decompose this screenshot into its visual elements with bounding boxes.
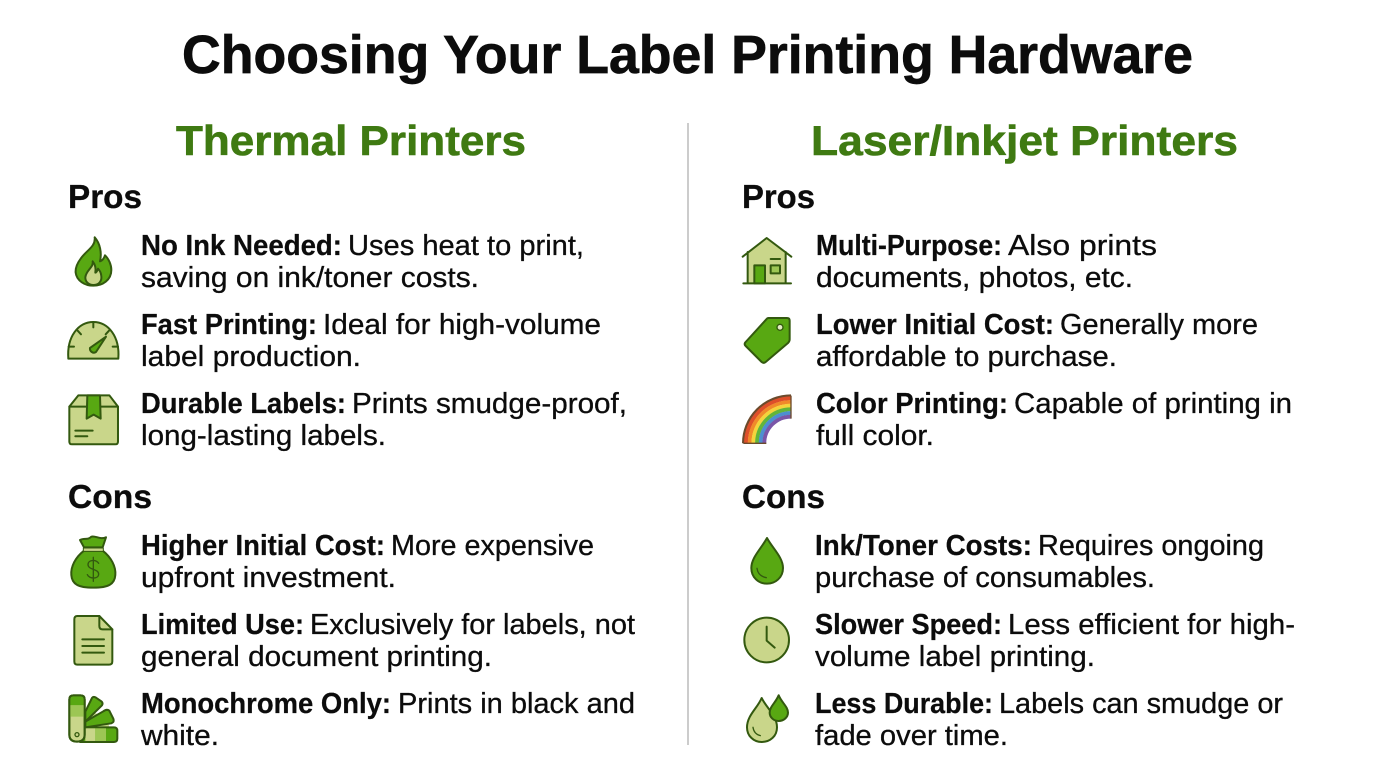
text: ink/toner costs: Ink/Toner Costs: bbox=[815, 530, 1032, 562]
heading: thermal printers: Thermal Printers bbox=[176, 117, 526, 164]
icon: colour swatches bbox=[69, 695, 117, 742]
text: fast printing bbox=[141, 309, 601, 373]
text: multi-purpose: Also prints bbox=[1008, 230, 1157, 262]
text: color printing: Color Printing: bbox=[816, 388, 1008, 420]
text: higher initial cost: upfront investment. bbox=[141, 562, 396, 594]
heading: laser/inkjet printers: Laser/Inkjet Printers bbox=[811, 117, 1238, 164]
text: durable labels: long-lasting labels. bbox=[141, 420, 386, 452]
text: limited use: general document printing. bbox=[141, 641, 492, 673]
icon: price tag bbox=[745, 318, 790, 363]
text: limited use: Exclusively for labels, not bbox=[310, 609, 635, 641]
text: higher initial cost: Higher Initial Cost: bbox=[141, 530, 385, 562]
icon: package box bbox=[69, 395, 118, 444]
icon: house bbox=[743, 238, 791, 283]
text: durable labels bbox=[141, 388, 627, 452]
text: ink/toner costs: purchase of consumables. bbox=[815, 562, 1155, 594]
text: higher initial cost bbox=[141, 530, 594, 594]
text: multi-purpose: Multi-Purpose: bbox=[816, 230, 1002, 262]
text: ink/toner costs: Requires ongoing bbox=[1038, 530, 1264, 562]
icon: rainbow bbox=[743, 396, 791, 443]
icon: fading drops bbox=[747, 695, 788, 742]
text: monochrome only: Prints in black and bbox=[398, 688, 635, 720]
text: slower speed: Slower Speed: bbox=[815, 609, 1002, 641]
text: color printing bbox=[816, 388, 1292, 452]
text: no ink needed: saving on ink/toner costs. bbox=[141, 262, 479, 294]
text: less durable: Labels can smudge or bbox=[999, 688, 1284, 720]
text: lower initial cost: affordable to purchase. bbox=[816, 341, 1117, 373]
text: fast printing: Fast Printing: bbox=[141, 309, 317, 341]
text: fast printing: label production. bbox=[141, 341, 361, 373]
text: durable labels: Prints smudge-proof, bbox=[352, 388, 627, 420]
icon: speed gauge bbox=[68, 322, 118, 359]
heading: thermal pros: Pros bbox=[68, 178, 142, 215]
text: lower initial cost bbox=[816, 309, 1258, 373]
text: slower speed bbox=[815, 609, 1295, 673]
text: higher initial cost: More expensive bbox=[391, 530, 594, 562]
text: less durable: Less Durable: bbox=[815, 688, 993, 720]
text: lower initial cost: Lower Initial Cost: bbox=[816, 309, 1054, 341]
text: durable labels: Durable Labels: bbox=[141, 388, 346, 420]
text: no ink needed bbox=[141, 230, 584, 294]
heading: thermal cons: Cons bbox=[68, 478, 152, 515]
text: lower initial cost: Generally more bbox=[1060, 309, 1258, 341]
text: no ink needed: No Ink Needed: bbox=[141, 230, 342, 262]
text: monochrome only: white. bbox=[140, 720, 219, 752]
text: no ink needed: Uses heat to print, bbox=[348, 230, 584, 262]
panel: laser and inkjet printers bbox=[742, 117, 1295, 752]
text: monochrome only: Monochrome Only: bbox=[141, 688, 391, 720]
icon: clock bbox=[744, 618, 789, 662]
text: slower speed: Less efficient for high- bbox=[1008, 609, 1295, 641]
panel: thermal printers bbox=[68, 117, 635, 752]
heading: laser cons: Cons bbox=[742, 478, 825, 515]
text: ink/toner costs bbox=[815, 530, 1264, 594]
text: less durable: fade over time. bbox=[815, 720, 1008, 752]
text: limited use: Limited Use: bbox=[141, 609, 304, 641]
icon: money bag bbox=[71, 536, 115, 588]
text: fast printing: Ideal for high-volume bbox=[323, 309, 601, 341]
text: slower speed: volume label printing. bbox=[815, 641, 1095, 673]
heading: laser pros: Pros bbox=[742, 178, 815, 215]
text: limited use bbox=[141, 609, 635, 673]
text: color printing: full color. bbox=[816, 420, 934, 452]
text: multi-purpose bbox=[816, 230, 1157, 294]
icon: document bbox=[74, 616, 112, 665]
text: monochrome only bbox=[140, 688, 635, 752]
icon: ink drop bbox=[751, 538, 783, 584]
text: color printing: Capable of printing in bbox=[1014, 388, 1292, 420]
title: Choosing Your Label Printing Hardware bbox=[182, 25, 1193, 85]
text: less durable bbox=[815, 688, 1284, 752]
icon: flame bbox=[76, 237, 111, 286]
text: multi-purpose: documents, photos, etc. bbox=[816, 262, 1133, 294]
